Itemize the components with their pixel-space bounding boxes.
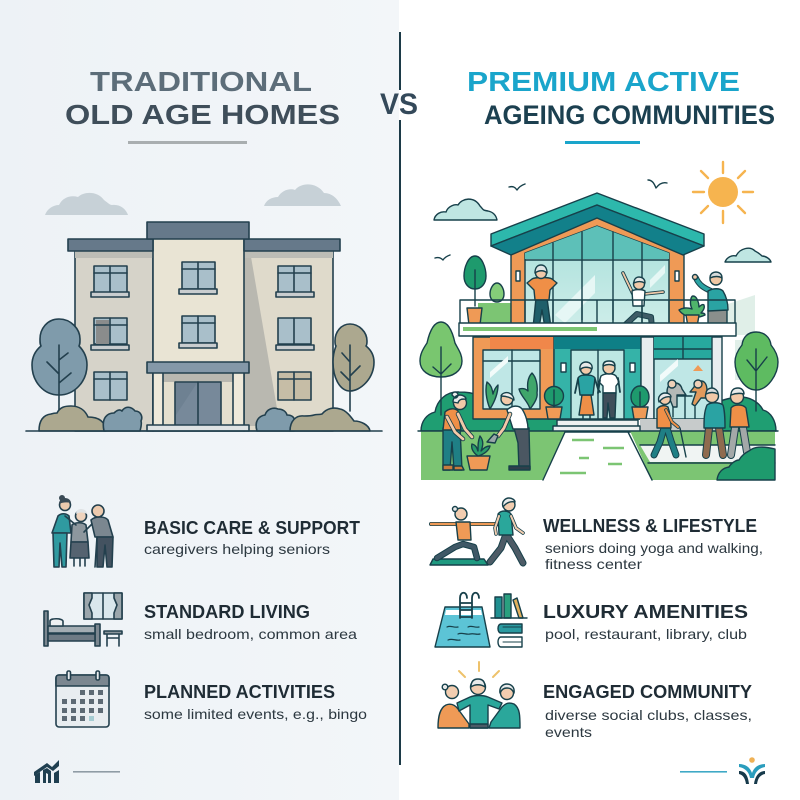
heading: LUXURY AMENITIES [543,602,748,622]
heading: traditional [65,66,340,130]
couple in doorway [575,361,620,419]
background bushes [421,392,776,431]
description line two: events [545,724,592,740]
item: wellness and lifestyle [430,498,763,572]
window bars [94,262,311,400]
right wing [244,251,333,431]
heading: PLANNED ACTIVITIES [144,682,335,702]
sun [693,162,753,223]
heading: premium: PREMIUM ACTIVE [467,66,740,97]
icon: caregivers helping senior [52,495,113,567]
description line two: fitness center [545,556,642,572]
upper wall [511,214,684,329]
balcony person: stretching [622,273,663,328]
upper glazing [525,226,669,331]
gardener woman [443,392,472,470]
ground tree left [420,322,462,415]
ground tree right [735,332,778,411]
footer logo: premium [739,757,765,784]
panel background: premium [399,0,800,800]
distant lawn behind balcony [478,303,512,323]
walking man with cane [654,393,686,457]
walking friends [704,388,749,455]
clouds [434,199,497,220]
cafe group [667,380,707,419]
ground and path lines [418,431,778,480]
roofs [68,222,340,251]
steps and patio [553,419,715,432]
description: diverse social clubs, classes, [545,707,752,723]
heading: traditional: OLD AGE HOMES [65,99,340,130]
heading: premium: AGEING COMMUNITIES [484,100,775,130]
lawn [421,431,565,480]
heading: ENGAGED COMMUNITY [543,682,752,702]
icon: yoga and walking seniors [430,498,523,565]
description: seniors doing yoga and walking, [545,540,763,556]
centre block [153,238,244,431]
heading: traditional: TRADITIONAL [90,66,312,97]
item: luxury amenities [435,593,748,647]
heading: BASIC CARE & SUPPORT [144,518,360,538]
icon: pool and books [435,593,527,647]
entrance [163,372,233,426]
illustration: premium building [418,162,778,480]
VS label: VS [380,88,418,121]
birds [435,180,667,260]
clouds [45,184,341,215]
bushes [39,406,370,431]
item: engaged community [438,662,752,740]
balcony rail [460,300,735,324]
centre divider [399,32,401,765]
balcony people [527,265,728,328]
balcony person: waving [692,272,728,328]
wall lamps [516,271,679,281]
description: caregivers helping seniors [144,541,330,557]
path dashes [560,440,624,473]
roof [491,193,704,246]
description: some limited events, e.g., bingo [144,706,367,722]
heading: premium [467,66,775,130]
description: small bedroom, common area [144,626,357,642]
footer rule: traditional [73,771,120,773]
windows [94,262,311,400]
heading underline: traditional [128,141,247,144]
balcony person: orange shirt [527,265,557,328]
left wing [75,251,153,431]
item: standard living [44,593,357,646]
foreground bush [717,447,775,480]
trees [32,319,87,395]
description: pool, restaurant, library, club [545,626,747,642]
heading underline: premium [565,141,640,144]
heading: WELLNESS & LIFESTYLE [543,516,757,536]
panel background: traditional [0,0,399,800]
heading: STANDARD LIVING [144,602,310,622]
window plants [486,373,537,409]
ground line [26,430,382,432]
footer logo: traditional [34,760,59,783]
gardener man [487,393,530,470]
window sills [91,289,314,350]
potted seedling [467,436,490,470]
icon: three seniors with rays [438,662,520,728]
footer rule: premium [680,771,727,773]
wing shadow [244,251,280,426]
balcony slab [459,323,736,336]
icon: calendar [56,671,109,727]
illustration: traditional building [26,184,382,431]
balcony plants [464,256,705,327]
potted shrubs [544,386,649,419]
ground floor [473,337,722,419]
icon: bed, window and table [44,593,122,646]
item: planned activities [56,671,367,727]
item: basic care and support [52,495,360,567]
